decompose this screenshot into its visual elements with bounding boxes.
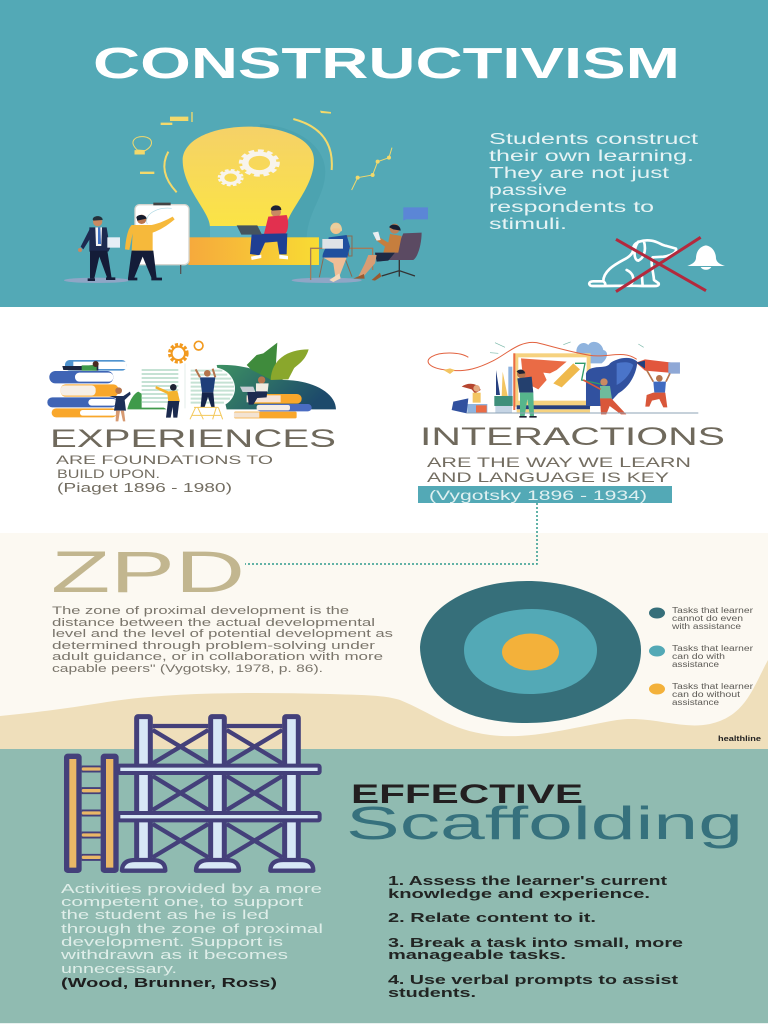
legend item: with assistance: assistance	[672, 660, 720, 669]
icon: bell	[687, 245, 725, 270]
legend item: without assistance: Tasks that learner	[672, 682, 753, 691]
icon: crossed-out dog and bell	[589, 237, 725, 292]
ground line	[467, 411, 698, 414]
person: man in green trousers	[517, 370, 537, 418]
person: seated with laptop	[237, 205, 288, 260]
list: scaffolding steps: 2. Relate content to it.	[388, 911, 596, 925]
panel: constructivism header	[0, 0, 768, 307]
stepladder	[190, 407, 223, 419]
person: man on office chair	[353, 224, 422, 281]
chart: concentric zones	[420, 581, 641, 723]
connector: dotted line	[245, 503, 537, 564]
text: experiences description: (Piaget 1896 - 1980)	[57, 480, 232, 495]
legend item: cannot do: Tasks that learner	[672, 606, 753, 615]
list: scaffolding steps	[388, 874, 683, 1000]
cross braces	[153, 726, 282, 857]
list: scaffolding steps: 4. Use verbal prompts to assist	[388, 973, 679, 987]
person: reader on books	[62, 361, 99, 371]
plant mound	[217, 365, 336, 409]
document pages	[142, 363, 235, 408]
text: scaffolding definition: Activities provided by a more	[61, 881, 322, 896]
legend item: without assistance: can do without	[672, 690, 741, 699]
icon: orange gears	[170, 341, 203, 362]
person: woman in yellow	[155, 384, 180, 418]
illustration: books and people	[47, 341, 336, 421]
intro text: their own learning.	[489, 148, 694, 165]
person: man holding giant pencil	[636, 359, 680, 407]
list: scaffolding steps: knowledge and experience.	[388, 887, 650, 901]
legend item: without assistance	[649, 682, 753, 707]
text: interactions description: ARE THE WAY WE LEARN	[427, 455, 691, 470]
stack of books left	[47, 360, 127, 417]
brushes	[494, 367, 513, 413]
feet	[122, 860, 313, 871]
panel: zone of proximal development	[0, 503, 768, 749]
person: woman pulling rope	[583, 378, 626, 414]
text: zpd definition: determined through problem-solving under	[52, 640, 376, 652]
heading: effective: EFFECTIVE	[351, 779, 583, 809]
intro text	[489, 131, 699, 233]
legend item: without assistance: assistance	[672, 698, 720, 707]
text: scaffolding definition: unnecessary.	[61, 961, 177, 976]
text: experiences description	[56, 453, 273, 495]
credit: healthline: healthline	[718, 734, 761, 743]
paint roller	[553, 363, 605, 387]
person: man in suit	[78, 216, 120, 281]
icon: small bulb	[133, 137, 151, 154]
illustration: scaffold and ladder	[67, 717, 320, 871]
text: scaffolding definition	[59, 881, 323, 976]
heading: interactions: INTERACTIONS	[420, 423, 725, 451]
legend item: with assistance: can do with	[672, 652, 725, 661]
person: man with laptop on books	[240, 376, 269, 405]
icon: gears	[220, 151, 277, 185]
legend item: cannot do: cannot do even	[672, 614, 743, 623]
speech bubble	[403, 207, 428, 221]
text: zpd definition: level and the level of potential development as	[52, 628, 393, 640]
legend item: with assistance	[649, 644, 753, 669]
text: zpd definition: The zone of proximal development is the	[52, 605, 349, 617]
intro text: passive	[489, 182, 567, 199]
tan wave	[0, 660, 768, 749]
text: experiences description: BUILD UPON.	[57, 467, 160, 481]
intro text: They are not just	[489, 165, 670, 182]
posts	[137, 717, 298, 862]
heading: zpd: ZPD	[51, 540, 245, 605]
text: zpd definition	[52, 605, 393, 675]
text: citation: (Wood, Brunner, Ross)	[61, 975, 277, 990]
text: zpd definition: distance between the actual developmental	[52, 617, 375, 629]
icon: dog outline	[589, 240, 676, 286]
text: scaffolding definition: development. Support is	[61, 934, 284, 949]
intro text: respondents to	[489, 199, 654, 216]
text: scaffolding definition: through the zone of proximal	[61, 921, 323, 936]
panel: experiences and interactions	[0, 307, 768, 533]
squiggle line	[428, 342, 637, 371]
person: man with raised arms	[196, 369, 215, 407]
text: experiences description: ARE FOUNDATIONS TO	[56, 453, 273, 467]
list: scaffolding steps: 3. Break a task into small, more	[388, 936, 683, 950]
illustration: painting collaboration	[428, 342, 698, 418]
label bar: vygotsky: (Vygotsky 1896 - 1934)	[429, 487, 647, 503]
person: woman at table	[310, 223, 373, 282]
legend item: with assistance: Tasks that learner	[672, 644, 753, 653]
text: scaffolding definition: withdrawn as it becomes	[59, 947, 289, 962]
legend item: cannot do: with assistance	[671, 622, 742, 631]
intro text: Students construct	[489, 131, 699, 148]
light plant	[576, 342, 607, 363]
red cross	[616, 237, 706, 292]
list: scaffolding steps: 1. Assess the learner's current	[388, 874, 668, 888]
illustration: light bulb teamwork	[64, 111, 428, 283]
panel: effective scaffolding	[0, 717, 768, 1024]
person: woman with laptop	[452, 384, 487, 413]
person: woman in navy dress	[109, 387, 131, 421]
heading: experiences: EXPERIENCES	[50, 425, 336, 453]
text: interactions description: AND LANGUAGE IS KEY	[427, 470, 669, 485]
light bulb	[183, 127, 314, 227]
intro text: stimuli.	[489, 216, 567, 233]
legend item: cannot do	[649, 606, 753, 631]
text: interactions description	[427, 455, 691, 485]
person: presenter in yellow	[125, 215, 175, 280]
whiteboard	[135, 203, 189, 274]
text: zpd definition: capable peers" (Vygotsky, 1978, p. 86).	[52, 663, 323, 675]
heading: scaffolding: Scaffolding	[346, 797, 743, 849]
icon: rising line chart	[352, 148, 392, 190]
list: scaffolding steps: students.	[388, 986, 476, 1000]
orange base	[188, 237, 319, 265]
text: scaffolding definition: the student as he is led	[61, 907, 269, 922]
beams	[118, 766, 320, 820]
text: zpd definition: adult guidance, or in collaboration with more	[52, 651, 383, 663]
list: scaffolding steps: manageable tasks.	[388, 948, 566, 962]
stack of books right	[234, 394, 312, 418]
text: scaffolding definition: competent one, to support	[61, 894, 303, 909]
easel canvas	[513, 353, 591, 412]
ladder	[67, 756, 116, 870]
legend	[649, 606, 753, 707]
label bar: vygotsky	[418, 486, 672, 503]
leaves	[247, 343, 309, 380]
title: CONSTRUCTIVISM	[93, 40, 680, 88]
dark plant	[586, 358, 637, 406]
